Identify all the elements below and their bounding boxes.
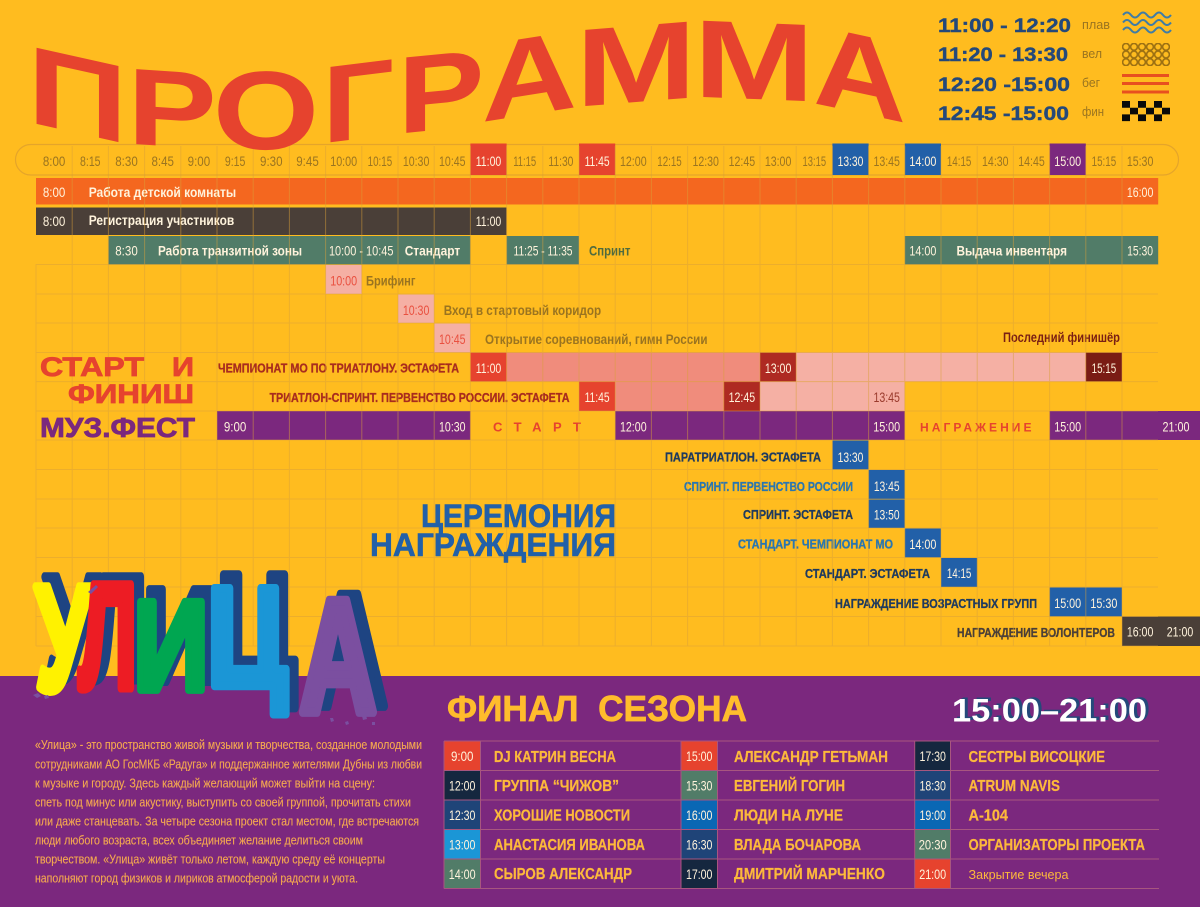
title: А: [813, 2, 906, 148]
timeline header: 10:15: [368, 154, 392, 169]
about text: спеть под минус или акустику, выступить со своей группой, прочитать стихи: [35, 795, 411, 809]
row: music fest: 12:00: [620, 418, 647, 434]
timeline header: 15:00: [1054, 153, 1081, 169]
about text: к музыке и городу. Здесь каждый желающий может выйти на сцену:: [35, 776, 375, 790]
lineup column 1: СЫРОВ АЛЕКСАНДР: [494, 866, 632, 883]
legend row: swim: 11:00 - 12:20: [938, 16, 1071, 37]
row: MO triathlon relay: 11:00: [476, 360, 501, 376]
timeline header: [16, 144, 1178, 175]
logo paint splatter: [33, 585, 375, 725]
timeline header: 14:30: [982, 154, 1009, 169]
row: opening ceremony: [434, 324, 1120, 352]
logo shadow: А: [310, 561, 388, 741]
row: opening ceremony: 10:45: [439, 331, 466, 347]
row: MO triathlon relay: ЧЕМПИОНАТ МО ПО ТРИАТЛОНУ. ЭСТАФЕТА: [218, 360, 460, 376]
award: paratriathlon: ПАРАТРИАТЛОН. ЭСТАФЕТА: [665, 450, 822, 464]
legend row: run: бег: [1082, 75, 1100, 90]
logo letters: [35, 552, 377, 747]
award: age groups: 15:00: [1054, 595, 1081, 611]
timeline header: 11:00: [476, 153, 501, 169]
row: transit zone: 10:00 - 10:45: [329, 242, 394, 258]
lineup column 3: СЕСТРЫ ВИСОЦКИЕ: [968, 749, 1105, 766]
lineup column 1: 14:00: [449, 866, 476, 882]
legend row: swim: [938, 12, 1171, 37]
logo shadow: [44, 542, 388, 741]
timeline header: 9:45: [296, 154, 319, 169]
title: Р: [398, 26, 484, 157]
timeline header: 10:30: [403, 154, 429, 169]
award: standard relay: [805, 558, 977, 587]
timeline header: 13:00: [765, 154, 791, 169]
lineup column 1: ГРУППА “ЧИЖОВ”: [494, 778, 619, 795]
timeline header: 12:15: [657, 154, 682, 169]
section label: award ceremony: НАГРАЖДЕНИЯ: [370, 527, 616, 563]
section label: award ceremony: ЦЕРЕМОНИЯ: [421, 498, 616, 534]
award: sprint russia: 13:45: [874, 478, 900, 494]
award: age groups: 15:30: [1090, 595, 1118, 611]
row: MO triathlon relay: [218, 352, 1122, 382]
row: start corridor: [398, 294, 601, 323]
row: transit zone: Стандарт: [405, 244, 461, 258]
timeline header: 8:15: [80, 154, 101, 169]
final time range: 15:00–21:00: [952, 692, 1147, 728]
row: sprint relay: 12:45: [729, 389, 755, 405]
row: transit zone: Спринт: [589, 244, 631, 258]
lineup column 2: 15:30: [686, 778, 713, 794]
timeline header: 15:15: [1092, 154, 1116, 169]
row: MO triathlon relay: 13:00: [765, 360, 792, 376]
final time range: 15:00–21:00: [955, 691, 1150, 727]
row: music fest: 15:00: [873, 418, 900, 434]
row: transit zone: 15:30: [1127, 242, 1153, 258]
logo letters: А: [299, 567, 377, 747]
lineup column 3: Закрытие вечера: [968, 867, 1069, 882]
logo letters: Л: [79, 552, 137, 720]
timeline header: 10:00: [330, 154, 357, 169]
lineup column 2: 16:30: [686, 836, 713, 852]
row: sprint relay: [270, 382, 905, 411]
logo shadow: У: [44, 545, 101, 713]
about text: люди любого возраста, всех объединяет желание делиться своим: [35, 834, 363, 848]
legend row: finish: фин: [1082, 104, 1104, 119]
timeline header: 11:15: [513, 154, 536, 169]
timeline header: 12:00: [620, 154, 647, 169]
timeline header: 11:45: [585, 153, 610, 169]
about text: творчеством. «Улица» живёт только летом, каждую среду её концерты: [35, 853, 385, 867]
legend row: bike: вел: [1082, 46, 1102, 61]
award: sprint relay: СПРИНТ. ЭСТАФЕТА: [743, 507, 854, 522]
row: start corridor: 10:30: [403, 302, 430, 318]
row: transit zone: 11:25 - 11:35: [514, 242, 573, 258]
logo: Улица: [33, 542, 388, 747]
row: children's room: 16:00: [1127, 184, 1154, 200]
award: standard MO: 14:00: [909, 536, 937, 552]
title: Р: [127, 45, 217, 173]
award: standard MO: СТАНДАРТ. ЧЕМПИОНАТ МО: [738, 536, 893, 552]
timeline header: 13:15: [803, 154, 826, 169]
row: transit zone: [108, 236, 1158, 264]
row: transit zone: Работа транзитной зоны: [158, 244, 302, 258]
award: sprint russia: СПРИНТ. ПЕРВЕНСТВО РОССИИ: [684, 479, 853, 494]
section label: start and finish: И: [172, 352, 194, 382]
row: transit zone: Выдача инвентаря: [956, 244, 1067, 258]
row: transit zone: 14:00: [909, 242, 937, 258]
lineup column 3: 18:30: [919, 778, 946, 794]
title: О: [213, 49, 319, 173]
lineup column 1: 12:00: [449, 778, 476, 794]
legend row: run: [938, 75, 1169, 96]
row: briefing: 10:00: [330, 272, 357, 288]
schedule rows: [36, 178, 1200, 646]
logo shadow: Ц: [216, 542, 296, 710]
lineup column 1: 12:30: [449, 807, 476, 823]
award: sprint relay: 13:50: [874, 506, 900, 522]
award: standard relay: СТАНДАРТ. ЭСТАФЕТА: [805, 566, 931, 581]
lineup column 1: ХОРОШИЕ НОВОСТИ: [494, 808, 630, 824]
legend row: swim: плав: [1082, 17, 1110, 32]
heading: season final: ФИНАЛ СЕЗОНА: [447, 688, 747, 729]
timeline header: 12:45: [729, 154, 755, 169]
award: paratriathlon: [665, 440, 869, 470]
section label: start and finish: СТАРТ: [40, 352, 145, 382]
award: volunteers: НАГРАЖДЕНИЕ ВОЛОНТЕРОВ: [957, 625, 1115, 640]
timeline header: 15:30: [1127, 154, 1153, 169]
row: opening ceremony: Последний финишёр: [1003, 330, 1120, 345]
timeline header: 11:30: [548, 154, 573, 169]
lineup column 3: 21:00: [919, 866, 946, 882]
award: age groups: НАГРАЖДЕНИЕ ВОЗРАСТНЫХ ГРУПП: [835, 596, 1037, 611]
row: briefing: Брифинг: [366, 274, 416, 288]
row: sprint relay: 11:45: [585, 389, 610, 405]
section label: award ceremony: [370, 498, 616, 563]
lineup column 3: 20:30: [919, 836, 947, 852]
timeline header: 14:00: [909, 153, 937, 169]
timeline header: 8:30: [115, 154, 138, 169]
timeline header: 13:30: [838, 153, 863, 169]
title: М: [694, 0, 814, 125]
award: age groups: [835, 588, 1122, 616]
row: opening ceremony: Открытие соревнований, гимн России: [485, 332, 708, 347]
title: [27, 0, 906, 173]
logo letters: И: [133, 574, 209, 717]
title: Г: [322, 36, 394, 167]
row: MO triathlon relay: 15:15: [1092, 360, 1116, 376]
lineup column 3: ATRUM NAVIS: [968, 778, 1060, 795]
legend row: bike: 11:20 - 13:30: [938, 45, 1068, 66]
timeline header: 9:00: [188, 154, 210, 169]
timeline header: 8:45: [151, 154, 174, 169]
lineup column 2: ЕВГЕНИЙ ГОГИН: [734, 776, 845, 795]
lineup column 1: [449, 748, 645, 883]
row: registration: 11:00: [476, 213, 501, 229]
legend row: finish: 12:45 -15:00: [938, 104, 1069, 125]
concert lineup table: [444, 741, 1159, 888]
row: music fest: 15:00: [1054, 418, 1081, 434]
award: sprint relay: [743, 500, 905, 528]
row: registration: [36, 208, 507, 235]
timeline header: 9:15: [225, 154, 245, 169]
lineup column 2: 15:00: [686, 748, 713, 764]
timeline header: 9:30: [260, 154, 283, 169]
about text: [35, 738, 422, 886]
row: transit zone: 8:30: [115, 242, 138, 258]
legend row: bike: [938, 43, 1170, 66]
lineup column 2: 16:00: [686, 807, 713, 823]
section label: start and finish: ФИНИШ: [68, 379, 194, 409]
timeline header: 8:00: [43, 154, 65, 169]
row: music fest: [217, 411, 1200, 440]
row: music fest: 9:00: [224, 418, 247, 434]
row: music fest: СТАРТ: [493, 420, 581, 434]
about text: сотрудниками АО ГосМКБ «Радуга» и поддержанное жителями Дубны из любви: [35, 757, 422, 771]
legend: discipline times: [938, 12, 1171, 125]
row: registration: 8:00: [43, 213, 66, 229]
lineup column 2: АЛЕКСАНДР ГЕТЬМАН: [734, 749, 888, 766]
section label: start and finish: [40, 352, 194, 409]
row: children's room: Работа детской комнаты: [89, 185, 236, 200]
row: sprint relay: 13:45: [873, 389, 900, 405]
lineup column 2: ЛЮДИ НА ЛУНЕ: [734, 808, 843, 824]
timeline header: 10:45: [439, 154, 466, 169]
logo letters: У: [35, 555, 92, 723]
lineup column 3: 17:30: [919, 748, 946, 764]
row: children's room: 8:00: [43, 184, 66, 200]
lineup column 2: 17:00: [686, 866, 713, 882]
lineup column 2: ДМИТРИЙ МАРЧЕНКО: [734, 864, 885, 883]
title: П: [27, 22, 128, 168]
about text: «Улица» - это пространство живой музыки и творчества, созданное молодыми: [35, 738, 422, 752]
about text: или даже станцевать. За четыре сезона проект стал местом, где встречаются: [35, 815, 419, 829]
award: volunteers: [957, 616, 1200, 646]
lineup column 1: АНАСТАСИЯ ИВАНОВА: [494, 837, 645, 854]
row: music fest: 10:30: [439, 418, 466, 434]
lineup column 2: ВЛАДА БОЧАРОВА: [734, 837, 861, 854]
title: А: [482, 7, 577, 146]
award: standard relay: 14:15: [947, 565, 971, 581]
logo shadow: Л: [89, 544, 147, 712]
lineup column 2: [686, 748, 888, 883]
section label: music fest: МУЗ.ФЕСТ: [40, 412, 195, 443]
lineup column 3: ОРГАНИЗАТОРЫ ПРОЕКТА: [968, 837, 1145, 854]
lineup column 1: DJ КАТРИН ВЕСНА: [494, 749, 616, 766]
award: paratriathlon: 13:30: [838, 449, 863, 465]
timeline header: 14:15: [947, 154, 971, 169]
purple footer panel: [0, 676, 1200, 907]
logo shadow: И: [142, 560, 218, 711]
row: registration: Регистрация участников: [89, 213, 234, 228]
award: sprint russia: [684, 470, 905, 499]
row: start corridor: Вход в стартовый коридор: [444, 303, 601, 318]
about text: наполняют город физиков и лириков атмосферой радости и уюта.: [35, 872, 358, 886]
row: music fest: НАГРАЖЕНИЕ: [920, 420, 1032, 434]
row: music fest: 21:00: [1162, 418, 1190, 434]
row: sprint relay: ТРИАТЛОН-СПРИНТ. ПЕРВЕНСТВО РОССИИ. ЭСТАФЕТА: [270, 390, 570, 405]
timeline header: 14:45: [1018, 154, 1045, 169]
lineup column 3: [919, 748, 1145, 882]
lineup column 1: 9:00: [451, 748, 474, 764]
award: volunteers: 16:00: [1127, 624, 1154, 640]
award: standard MO: [738, 528, 941, 558]
legend row: run: 12:20 -15:00: [938, 75, 1070, 96]
legend row: finish: [938, 101, 1170, 125]
timeline header: 12:30: [692, 154, 719, 169]
title: М: [576, 0, 696, 131]
lineup column 3: А-104: [968, 808, 1008, 824]
lineup column 1: 13:00: [449, 836, 476, 852]
logo letters: Ц: [207, 557, 287, 716]
row: children's room: [36, 178, 1158, 204]
timeline header: 13:45: [873, 154, 900, 169]
row: briefing: [326, 265, 416, 294]
lineup column 3: 19:00: [919, 807, 946, 823]
